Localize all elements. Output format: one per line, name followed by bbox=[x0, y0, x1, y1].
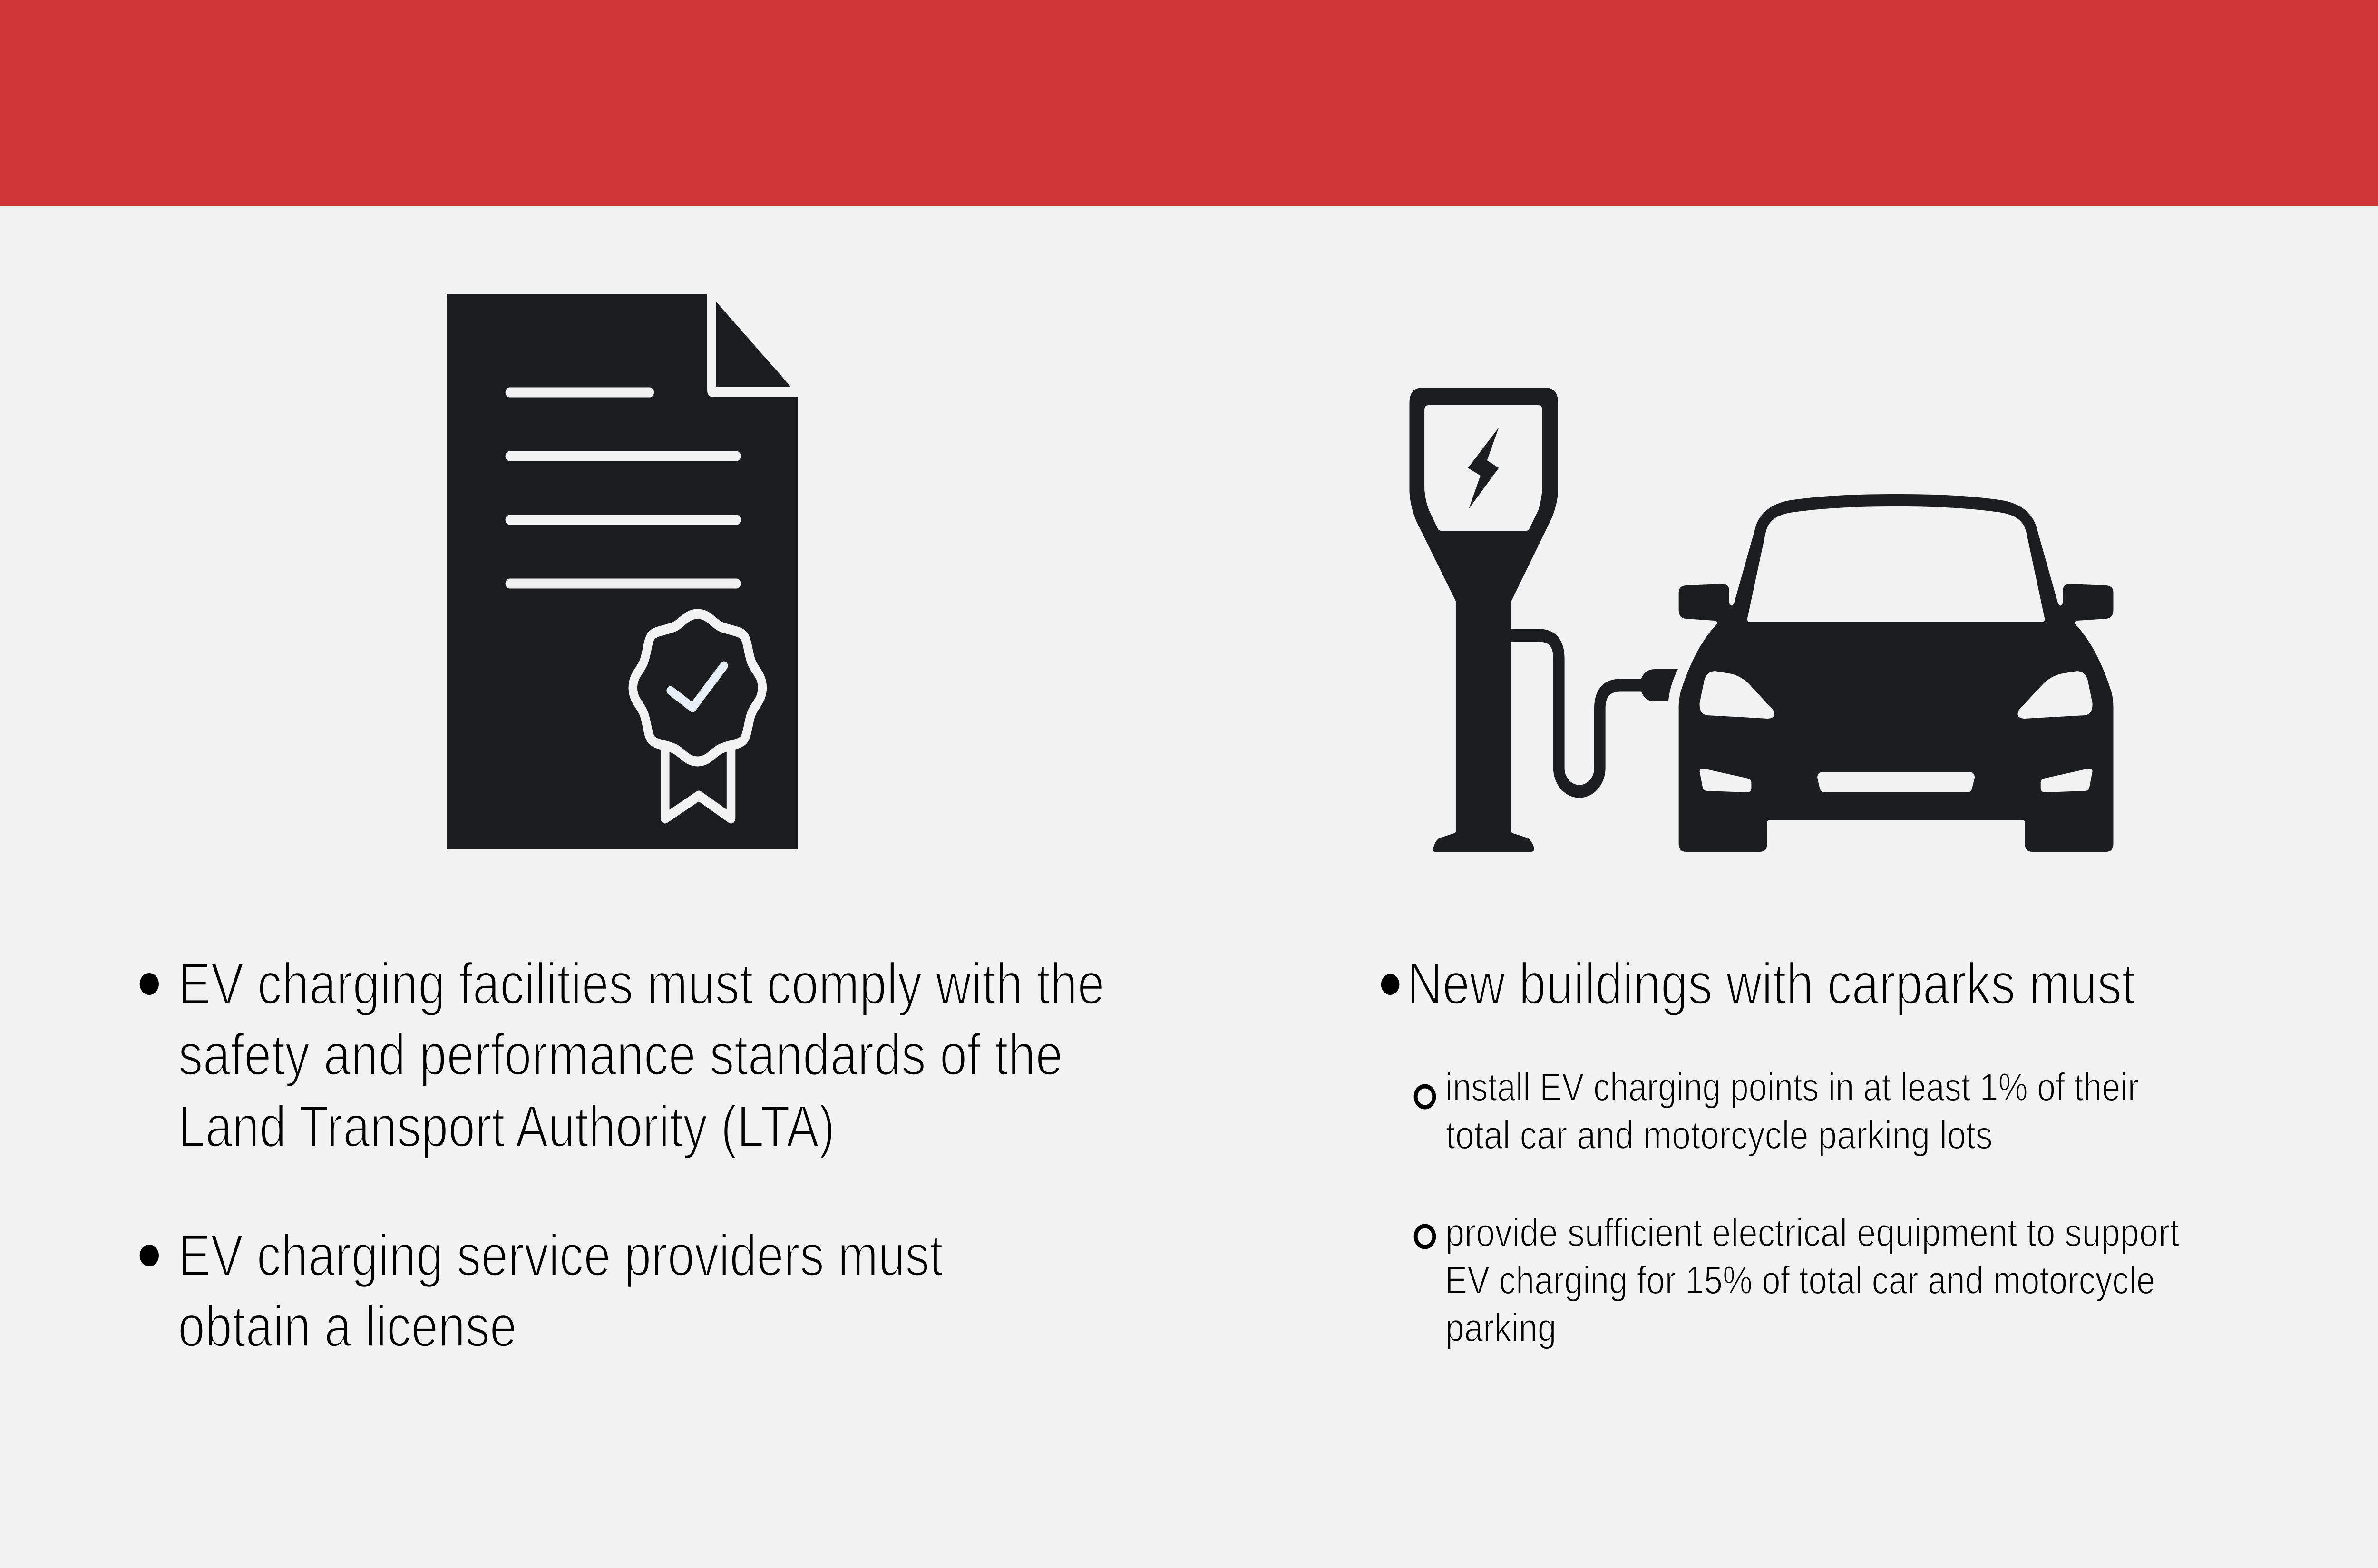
charging station bbox=[1409, 388, 1558, 852]
text: charging points requirement bbox=[1445, 1065, 2139, 1157]
document page bbox=[447, 294, 798, 849]
text block: left requirements bbox=[140, 951, 1105, 1359]
text: charging points requirement: install EV charging points in at least 1% of their bbox=[1445, 1065, 2139, 1109]
bullet bbox=[1381, 974, 1399, 995]
document folded corner bbox=[716, 302, 791, 387]
certificate seal bbox=[633, 614, 762, 761]
text: service provider requirement: obtain a license bbox=[178, 1293, 517, 1359]
icon: EV charger and car bbox=[1409, 388, 2113, 852]
ring bullet bbox=[1416, 1086, 1434, 1107]
check mark bbox=[671, 666, 724, 708]
icon: certified document bbox=[447, 294, 798, 849]
ring bullet bbox=[1416, 1226, 1434, 1247]
bullet bbox=[140, 973, 159, 995]
text: service provider requirement bbox=[178, 1222, 943, 1359]
charging cable bbox=[1509, 635, 1645, 791]
bullet bbox=[140, 1245, 159, 1266]
text: electrical equipment requirement: EV charging for 15% of total car and motorcycle bbox=[1445, 1258, 2155, 1302]
text: electrical equipment requirement bbox=[1445, 1210, 2179, 1350]
text: new buildings heading: New buildings with carparks must bbox=[1407, 951, 2135, 1017]
text: charging facilities requirement bbox=[178, 951, 1105, 1159]
text: charging facilities requirement: safety and performance standards of the bbox=[178, 1022, 1063, 1088]
text: electrical equipment requirement: provide sufficient electrical equipment to support bbox=[1445, 1210, 2179, 1255]
charging plug bbox=[1641, 669, 1678, 701]
text block: right requirements bbox=[1381, 951, 2179, 1350]
document text lines bbox=[510, 392, 736, 584]
text: charging points requirement: total car and motorcycle parking lots bbox=[1446, 1113, 1993, 1157]
header band bbox=[0, 0, 2378, 206]
text: charging facilities requirement: EV charging facilities must comply with the bbox=[178, 951, 1105, 1017]
lightning bolt bbox=[1468, 428, 1499, 509]
text: service provider requirement: EV charging service providers must bbox=[178, 1222, 943, 1288]
certificate ribbon bbox=[665, 750, 731, 818]
text: charging facilities requirement: Land Transport Authority (LTA) bbox=[178, 1093, 835, 1159]
car bbox=[1679, 494, 2113, 852]
text: electrical equipment requirement: parking bbox=[1445, 1305, 1556, 1350]
